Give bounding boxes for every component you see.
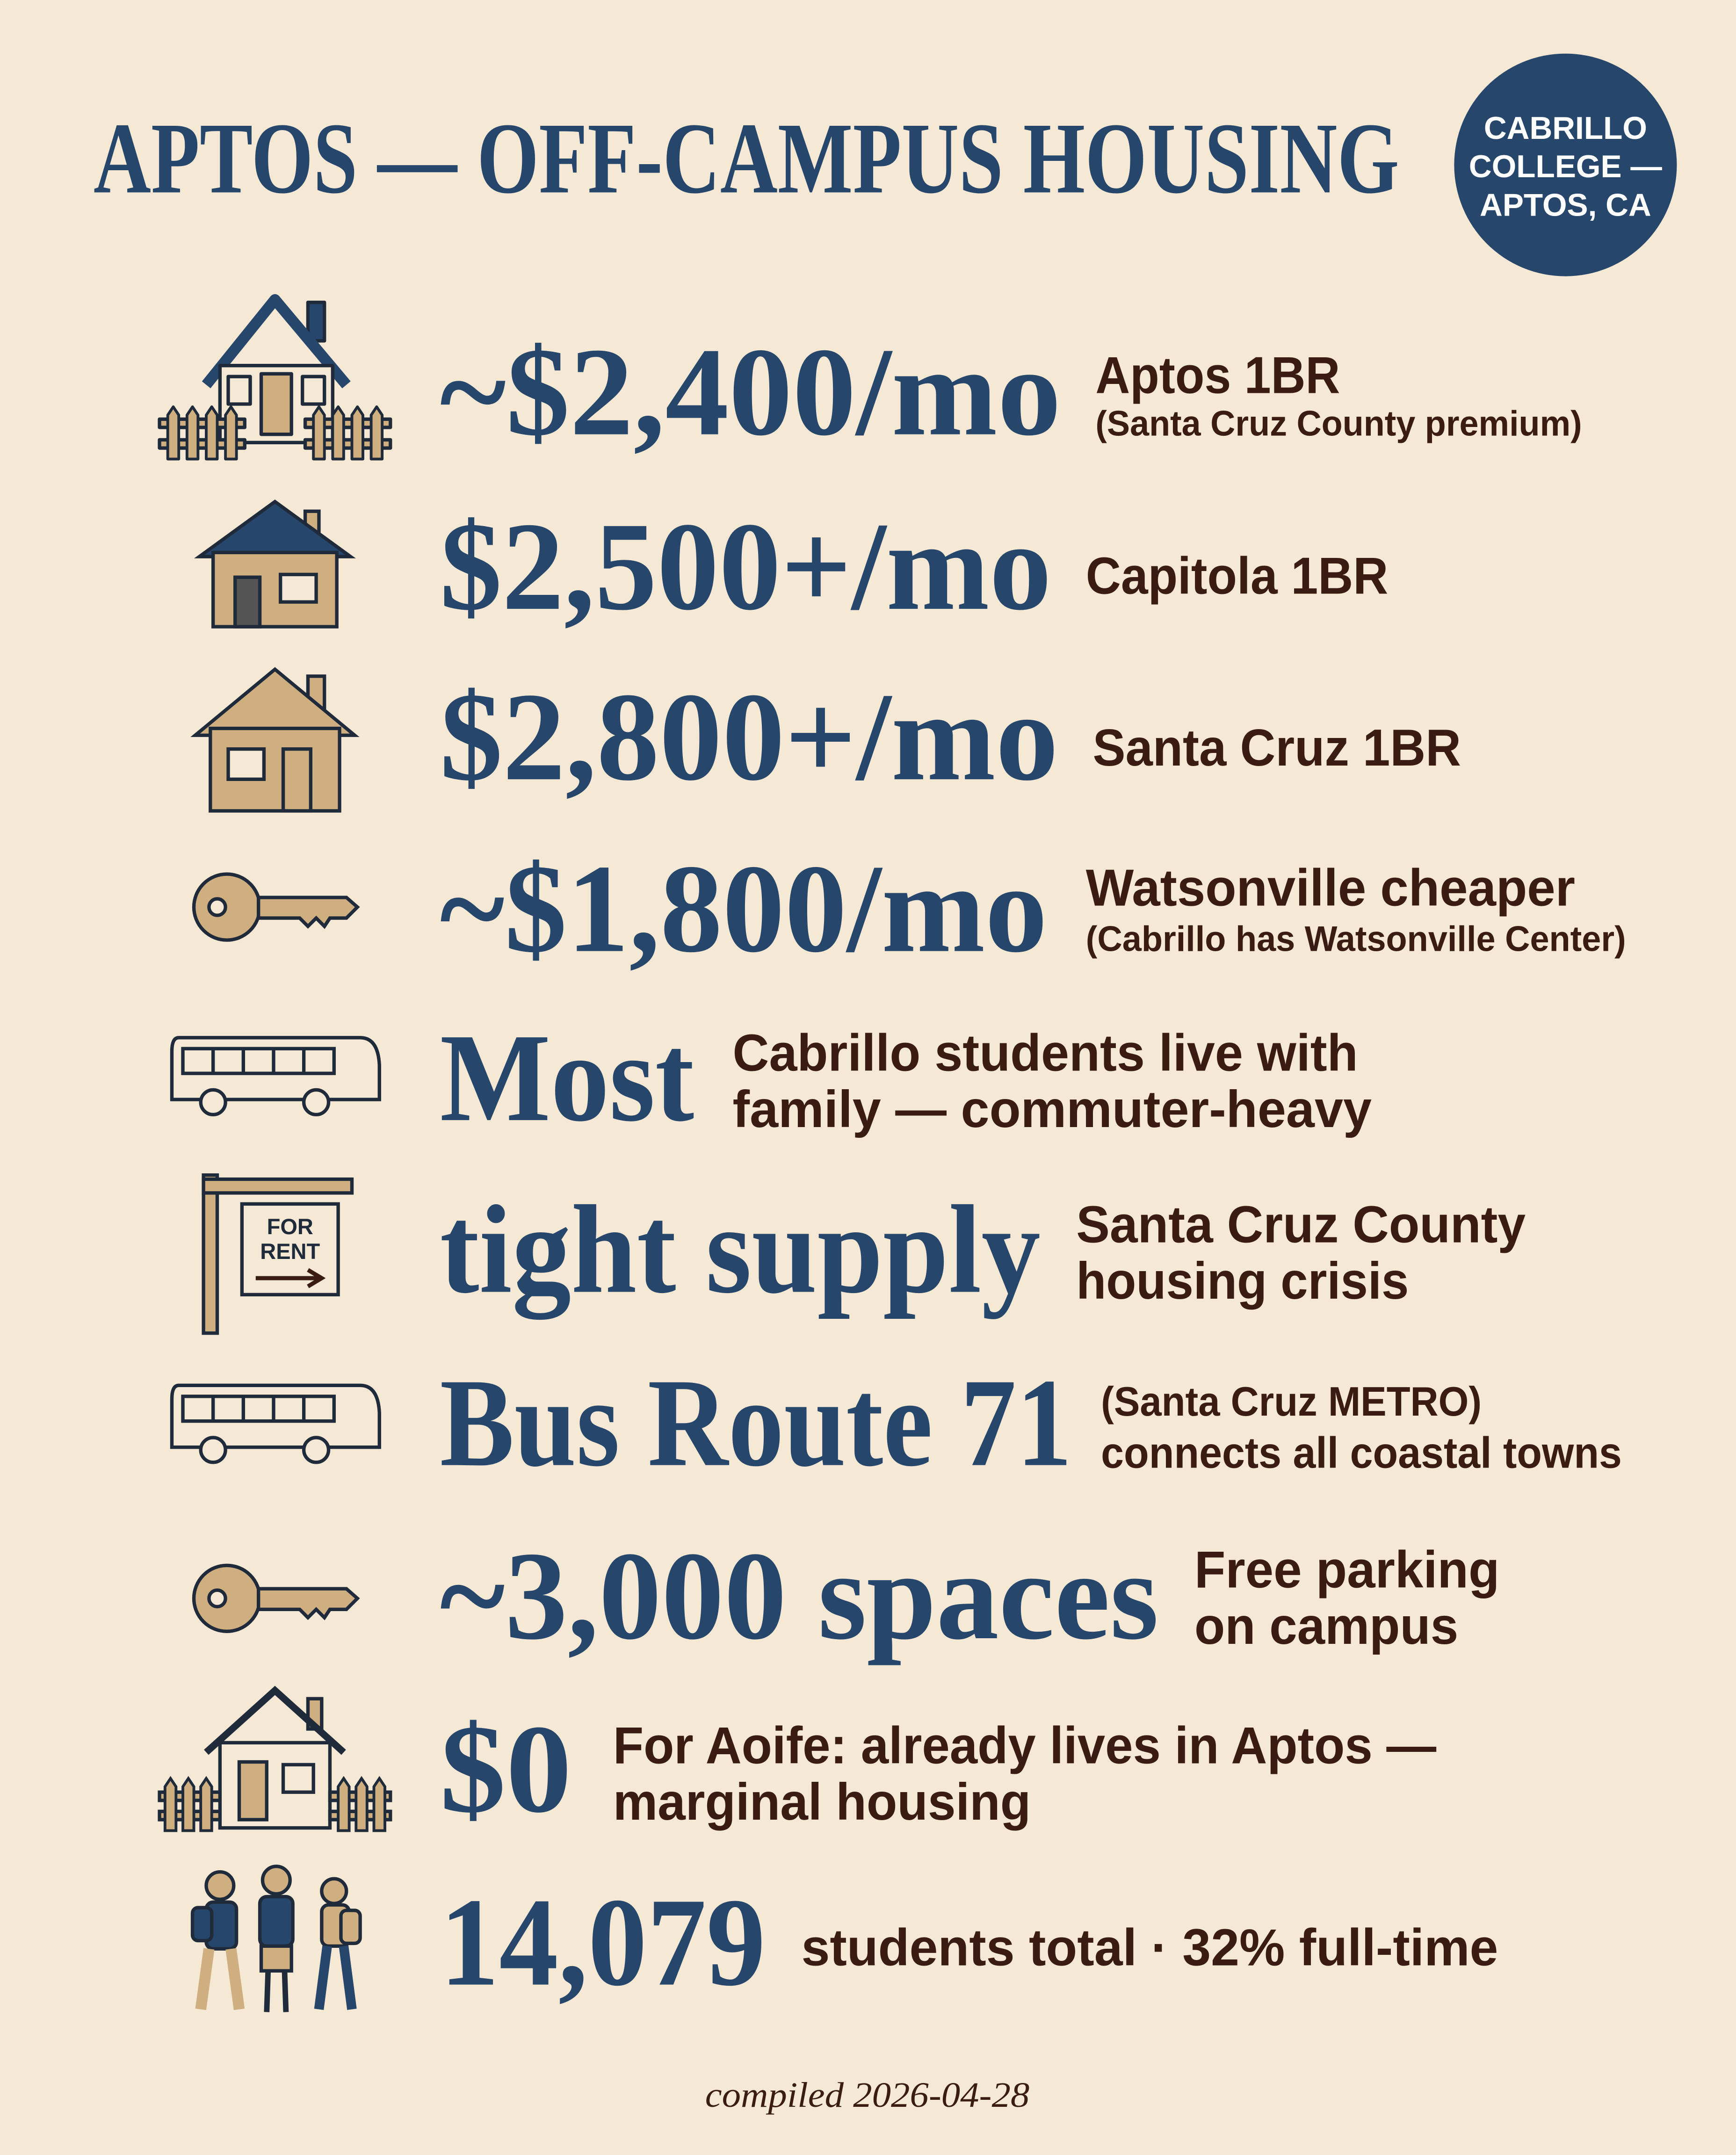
stat row 1: Aptos 1BR	[1095, 346, 1340, 404]
stat row 10: students total · 32% full-time	[801, 1918, 1498, 1976]
stat row 9: marginal housing	[613, 1772, 1031, 1831]
icon: house 3	[195, 669, 354, 811]
stat row 6: tight supply	[440, 1179, 1041, 1322]
icon: house with fence 2	[159, 1691, 391, 1830]
footer: compiled 2026-04-28	[705, 2075, 1029, 2115]
stat row 10	[440, 1873, 1498, 2012]
stat row 3: Santa Cruz 1BR	[1092, 718, 1461, 777]
stat row 6: Santa Cruz County	[1076, 1195, 1526, 1254]
stat row 9: $0	[440, 1699, 572, 1839]
icon: house with fence	[159, 300, 391, 459]
stat row 5: family — commuter-heavy	[733, 1080, 1372, 1138]
stat row 8: on campus	[1194, 1597, 1458, 1655]
icon: house 2	[199, 502, 351, 627]
stat row 3: $2,800+/mo	[440, 667, 1058, 807]
icon: for rent sign	[203, 1175, 352, 1333]
stat row 7: connects all coastal towns	[1101, 1428, 1622, 1477]
stat row 6: housing crisis	[1076, 1251, 1409, 1310]
badge: Cabrillo College: APTOS, CA	[1480, 188, 1651, 223]
icon: key	[194, 874, 357, 940]
stat row 7: Bus Route 71	[440, 1353, 1072, 1493]
icon: for rent sign: FOR	[267, 1214, 313, 1239]
icon: bus	[172, 1038, 379, 1114]
stat row 1	[440, 322, 1582, 462]
stat row 8: ~3,000 spaces	[440, 1526, 1159, 1666]
stat row 7: (Santa Cruz METRO)	[1101, 1378, 1482, 1425]
stat row 9	[440, 1699, 1437, 1839]
stat row 1: (Santa Cruz County premium)	[1095, 404, 1582, 444]
stat row 8: Free parking	[1194, 1540, 1499, 1598]
icon: bus 2	[172, 1385, 379, 1462]
stat row 7	[440, 1353, 1622, 1493]
badge: Cabrillo College: CABRILLO	[1484, 111, 1647, 146]
stat row 1: ~$2,400/mo	[440, 322, 1061, 462]
stat row 8	[440, 1526, 1499, 1666]
stat row 2: $2,500+/mo	[440, 497, 1051, 636]
stat row 5: Most	[440, 1008, 695, 1148]
stat row 5	[440, 1008, 1372, 1148]
stat row 3	[440, 667, 1461, 807]
icon: for rent sign: RENT	[260, 1239, 320, 1264]
stat row 4: (Cabrillo has Watsonville Center)	[1086, 919, 1626, 959]
stat row 9: For Aoife: already lives in Aptos —	[613, 1716, 1437, 1774]
badge: Cabrillo College: COLLEGE —	[1469, 149, 1662, 184]
stat row 2	[440, 497, 1388, 636]
icon: students	[193, 1866, 360, 2012]
stat row 4: ~$1,800/mo	[440, 839, 1048, 979]
stat row 6	[440, 1179, 1526, 1322]
stat row 5: Cabrillo students live with	[733, 1023, 1358, 1082]
icon: key 2	[194, 1565, 357, 1631]
stat row 10: 14,079	[440, 1873, 766, 2012]
stat row 4: Watsonville cheaper	[1086, 859, 1575, 917]
title: APTOS — OFF-CAMPUS HOUSING	[94, 102, 1399, 215]
badge: Cabrillo College	[1454, 54, 1677, 276]
stat row 4	[440, 839, 1626, 979]
stat row 2: Capitola 1BR	[1086, 547, 1388, 605]
